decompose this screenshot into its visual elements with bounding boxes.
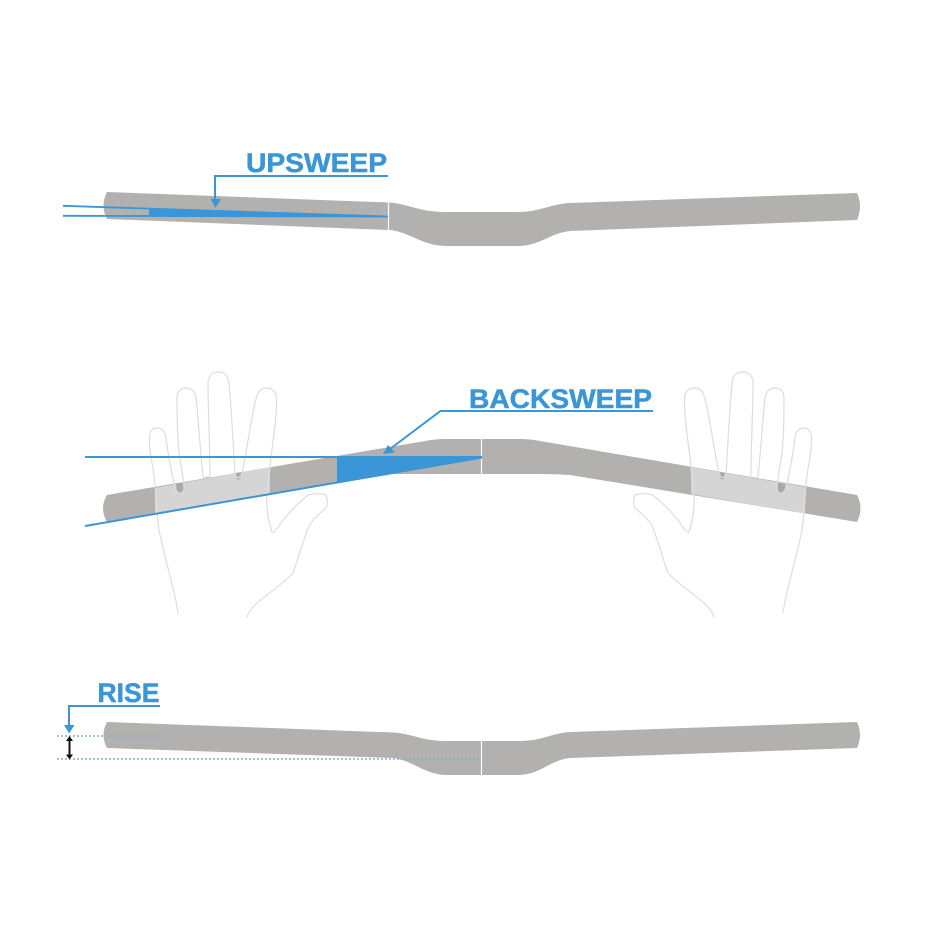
backsweep label: BACKSWEEP [469,384,652,414]
upsweep angle wedge [149,208,388,217]
upsweep leader arrow [210,176,388,208]
right grip zone [691,467,805,514]
rise leader arrow [64,706,160,734]
rise dimension arrow [66,736,73,760]
upsweep label: UPSWEEP [246,148,387,178]
backsweep angle lines [85,457,482,526]
right hand outline [634,372,812,617]
handlebar: rise view [104,722,860,775]
handlebar: backsweep view [103,439,860,522]
center mark [480,741,482,775]
right finger shadows [719,472,786,494]
upsweep angle lines [63,206,388,216]
left hand outline [149,372,328,617]
handlebar: upsweep view [104,192,860,246]
backsweep leader arrow [383,411,653,454]
panel: backsweep diagram [85,372,860,617]
backsweep angle wedge [337,457,482,482]
center mark [388,202,390,231]
center mark [480,439,482,474]
left grip zone [155,467,270,514]
rise label: RISE [98,678,160,708]
panel: rise diagram [57,678,860,775]
left finger shadows [176,472,242,494]
panel: upsweep diagram [63,148,860,246]
rise reference lines [57,736,481,759]
